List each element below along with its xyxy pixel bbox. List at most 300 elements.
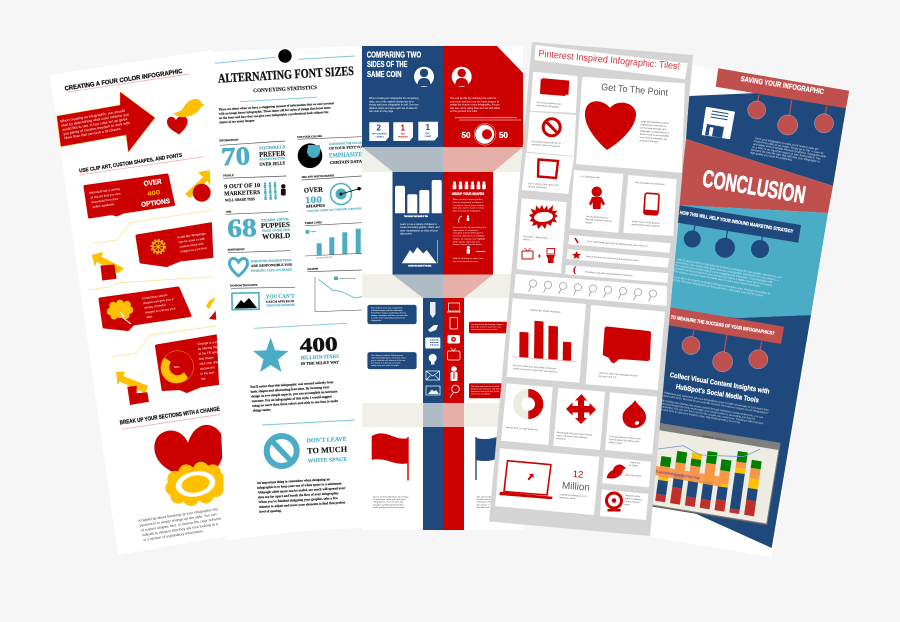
text: notice: design on two simple aspects, you can accomplish an intricate	[251, 389, 338, 398]
tile: water drop	[605, 392, 657, 454]
panel: red group shapes: choose 'Group' from the menu.	[453, 243, 482, 246]
callouts: blue: easily move and resize the object.	[371, 364, 400, 367]
icon: no sign	[267, 436, 297, 466]
stat: one 68 years: PUPPIES	[261, 221, 290, 230]
chart: stacked bar dashboard: Statistics - Analytics	[702, 434, 727, 442]
tile: no sign	[527, 112, 576, 156]
stat: mix and match shapes: SHAPES	[306, 203, 326, 209]
tile: get to the point: doesn't have to use incredible	[640, 133, 670, 138]
stat: one 68 years: 68	[227, 213, 257, 243]
heading: collect insights: Collect Visual Content Insights with	[669, 372, 770, 396]
callouts: red: You should start by choosing a logical	[471, 323, 503, 326]
icon: picture	[426, 386, 440, 395]
text: right intro: You can do this by choosing one color for	[450, 96, 497, 100]
chart: time lines bars: Legend	[310, 231, 316, 233]
title: COMPARING TWO	[367, 50, 421, 60]
text: break up: A helpful tip about breaking up your infographic into	[138, 507, 218, 523]
chart: time lines bars: 2011 2012 2013 2014	[316, 257, 332, 259]
stat: 400 billion stars: IN THE MILKY WAY	[301, 360, 339, 366]
tile: stacked pages: information and graphic	[536, 104, 560, 109]
stat: information 70: OVER JELLY	[259, 162, 286, 168]
stat: mix and match shapes	[302, 174, 362, 213]
icon: target	[330, 184, 362, 204]
callouts: red: experiment and you'll soon create	[471, 390, 499, 393]
stat: random thoughts: RANDOM THOUGHTS	[230, 284, 258, 287]
text: saving: as a PNG is an important aspect of your final product. This	[752, 145, 822, 161]
title: SIDES OF THE	[367, 59, 408, 69]
stat: information 70	[219, 138, 286, 171]
stat: one 68 years: YEARS UNTIL	[261, 217, 291, 222]
panel: red group shapes: them around your infographic.	[453, 210, 482, 213]
callout: fill donut: Change is a snap	[197, 339, 222, 346]
icon: big heart	[154, 425, 224, 482]
stat: random thoughts	[230, 284, 295, 310]
icon: blue flag	[475, 436, 500, 480]
callouts: blue: to create some commonly used icons for	[371, 316, 405, 320]
stat: mix and match shapes: 100	[305, 195, 322, 206]
callout: fill donut: in the tool	[200, 370, 214, 376]
tile: laptop stat: Million	[561, 481, 590, 494]
text: notice: things easier.	[253, 408, 271, 413]
text: intro: clutter of too many images.	[219, 118, 255, 124]
text: white space: An important thing to remember when designing an	[257, 477, 330, 485]
chart: time lines bars: TIMES LINES	[305, 221, 322, 225]
stat: sentiments heart: INBOUND MARKETERS	[251, 258, 292, 263]
stat: sentiments heart: ARE RESPONSIBLE FOR	[251, 263, 293, 268]
text: saving: format is the best file type that will keep your infographic in	[751, 148, 821, 164]
icon: arrow and circle	[185, 170, 211, 202]
tile: cell phones: A lot of people use cell phones	[635, 181, 666, 186]
stat: information 70: PEANUT BUTTER	[259, 156, 286, 161]
text: break up: sections is to simply change up the style. You can	[139, 512, 217, 528]
stat: sentiments heart: SENTIMENTS	[228, 248, 245, 252]
heading: break up	[119, 406, 223, 429]
tile: cell phones	[623, 175, 677, 236]
page: comparing two sides of the same coin	[362, 46, 523, 530]
callouts: red	[469, 322, 514, 398]
stat cards: CHART	[424, 135, 432, 138]
tile: water drop: miles of water	[609, 441, 623, 445]
callout: custom shapes: shapes can give you a	[143, 297, 174, 305]
callout: wingdings fonts: custom icons and	[179, 242, 204, 249]
callouts: blue: PowerPoint. Using a combination of basic	[371, 312, 406, 314]
tile: title: Pinterest Inspired Infographic: Tiles!	[538, 49, 680, 72]
text: left intro: data, one of the easiest design tips is to	[369, 99, 414, 103]
tile: four arrows: tapers will travel in four different	[556, 434, 588, 439]
chart: graphs line: GRAPHS	[307, 268, 319, 271]
icon: red person	[452, 67, 472, 87]
heading: four color: CREATING A FOUR COLOR INFOGRAPHIC	[64, 68, 183, 92]
text: flag left: to two major colors you give your	[373, 498, 406, 501]
text: right intro: each side and then use the basic shapes to	[450, 99, 500, 103]
tile: no sign: Don't forget to pay attention to	[531, 140, 562, 145]
text: insights: get great insight into how much traffic your visual content is generating and how it's	[661, 401, 756, 421]
tile: square outline: Use a variety of the ideas to fill	[528, 182, 559, 187]
icon: laptop	[499, 461, 553, 499]
icon: magnifier	[450, 385, 459, 398]
tile: marketers: Use the perfect icon to	[586, 215, 608, 220]
callouts: blue	[367, 305, 417, 369]
callouts: red: most in the area below	[471, 392, 491, 396]
tile: burst	[517, 198, 567, 273]
heading: white space: WHITE SPACE	[308, 457, 348, 464]
tile: title	[534, 45, 688, 79]
stat cards: HEADERS	[398, 136, 408, 138]
heading banner: saving: SAVING YOUR INFOGRAPHIC	[740, 74, 825, 96]
panel: red group shapes: You can do this by right clicking the	[453, 226, 487, 229]
stat: 400 billion stars: BILLION STARS	[301, 354, 339, 361]
tile: donut	[501, 383, 553, 445]
text: saving: high quality you need for publishing.	[750, 150, 793, 162]
text: inbound: fine way to have content that is more engaging and shareable. This infographic will	[675, 263, 773, 284]
stat cards: 1	[400, 124, 406, 132]
tile: marketers	[570, 170, 623, 233]
tile: webcam	[600, 489, 648, 520]
text: break up: of custom shapes, text, or inverse the color scheme	[140, 517, 221, 533]
heading banner: inbound: HOW THIS WILL HELP YOUR INBOUND MARKETING STRATEGY	[679, 210, 794, 235]
chart: stacked bar dashboard	[652, 423, 780, 526]
stat: information 70: 70	[220, 141, 251, 171]
chart: graphs line: Information from the web	[339, 277, 356, 280]
callout: fill donut: that shape.	[199, 355, 215, 361]
text: white space: minutes to adjust and move your elements to find that perfect	[259, 500, 346, 509]
icon: arrow and triangle	[206, 297, 218, 320]
icon: arrow and square	[92, 252, 124, 280]
icon: tablet	[450, 318, 458, 329]
callouts: red: particular icon schemes, and with a little	[471, 388, 504, 390]
callout: over 400 options: of clip art that you can	[90, 191, 121, 200]
text: flag left: designs a professional feel that	[373, 503, 404, 506]
pins: saving	[748, 95, 834, 135]
chart: 50/50 donut: 50	[499, 131, 509, 140]
callout: custom shapes: Combining custom	[142, 293, 168, 300]
tile: get to the point: infographic a visual balance. It	[640, 130, 670, 135]
text: insights: those who don't. But how do you actually measure the business impact of your infographics?	[663, 394, 769, 415]
stat: use your colors: CERTAIN DATA	[330, 159, 362, 165]
icon: tv	[448, 348, 460, 360]
stat: use your colors: ALTERNATE THE COLOR	[329, 141, 363, 146]
arrow callout: color scheme	[57, 92, 155, 152]
tile: get to the point: Large tiles should be used to	[641, 120, 670, 125]
heading banner: measure	[667, 307, 784, 344]
callouts: red: that make sense to show how it can	[471, 326, 501, 328]
icon: hand	[428, 325, 438, 332]
text: inbound: interesting. Use visuals with large amounts of actionable information for your viewers, a	[676, 260, 779, 282]
text: break up: or a section of explanatory information.	[143, 529, 204, 542]
page: pinterest tiles	[489, 42, 693, 536]
stat: people 9 out of 10	[223, 174, 287, 202]
stat: 400 billion stars	[299, 333, 339, 366]
tile: four arrows: Most people that move East Flemish	[557, 431, 593, 437]
stat: mix and match shapes: OVER	[304, 186, 324, 195]
callout: over 400 options: OVER	[143, 179, 162, 188]
text: inbound: Use of visual content in the inbound market is a demand for high quality, educational, and	[677, 257, 783, 280]
text: left intro: When creating an infographic for comparing	[369, 96, 419, 100]
stat: one 68 years	[226, 210, 291, 243]
tile: get to the point: central important take your	[640, 126, 666, 131]
text: flag right: make your content	[477, 501, 495, 504]
stat cards: CHARTS	[376, 136, 384, 138]
stat: people 9 out of 10: MARKETERS	[224, 190, 261, 197]
panel: blue bar chart: create interesting graphs, charts, and	[400, 226, 440, 229]
panel: red group shapes	[443, 172, 493, 274]
panel: red group shapes: all the pieces, right click and	[453, 240, 480, 243]
tile: bar graph: Be sure to label your bar graphs so that your	[513, 364, 557, 370]
callout: fill donut	[156, 335, 225, 392]
text: flag left: infographics. You can give and	[373, 501, 404, 504]
panel: blue bar chart	[392, 172, 443, 274]
tile: bar graph: viewers are aware of what they are looking at.	[513, 367, 558, 374]
callout: over 400 options: OPTIONS	[141, 198, 171, 209]
heading: clip art: USE CLIP ART, CUSTOM SHAPES, AND FONTS	[79, 153, 183, 174]
tile: cell phones: representing simple statistics	[631, 223, 661, 228]
callout: wingdings fonts	[137, 223, 216, 266]
arrow callout: color scheme: would like to use. A four color set up gives	[62, 117, 128, 132]
tile: burst: Infinite!	[522, 238, 530, 242]
stat: random thoughts: THROUGH ORANGES	[266, 303, 295, 307]
text: flag left: looks polished and easy to read.	[373, 506, 405, 509]
tile: webcam: Webcams were	[625, 494, 641, 498]
heading: conclusion: CONCLUSION	[701, 165, 808, 209]
page: four color infographic	[50, 50, 262, 555]
stat: mix and match shapes: CAN BE USED TO CREATE GRAPHS	[307, 207, 362, 213]
text: white space: infographic is to keep your use of white space to a minimum.	[257, 481, 342, 490]
text: white space: level of spacing.	[259, 509, 282, 514]
icon: red flag	[372, 433, 409, 480]
tile: get to the point: connect to the topic.	[639, 139, 659, 144]
callout: wingdings fonts: Fonts like Wingdings	[177, 231, 206, 239]
callouts: red: come from here to use on other	[471, 328, 498, 331]
text: notice: outcome. For an infographic of this style, I would suggest	[252, 394, 333, 403]
callout: over 400 options: 400	[147, 189, 161, 198]
icon: blue person	[414, 67, 434, 87]
chart: white mountain: SHAPES THAT MAKE UP THE AREA	[408, 264, 432, 268]
text: inbound: have fun with your infographics as they take time, and make sure that it's yours!	[670, 277, 764, 298]
icon: arrow and L shape	[116, 372, 149, 405]
stat: people 9 out of 10: PEOPLE	[223, 174, 234, 177]
icon: people grid	[264, 182, 286, 200]
callouts: blue: individual shapes and then offered by	[371, 309, 402, 312]
stat: mix and match shapes: MIX AND MATCH SHAPES	[302, 174, 335, 179]
stat cards: TWO	[400, 134, 406, 136]
stat: sentiments heart: FINDING LIFE ON MARS	[251, 268, 292, 273]
tile: water drop: Earth is about 326 million cubic	[609, 438, 640, 443]
callout: custom shapes: data.	[146, 314, 153, 319]
strips: facts: Most of the stars you view from Earth are Binary Stars	[586, 255, 639, 262]
tile: water drop: The total amount of water on the	[609, 435, 642, 441]
icon: yellow cloud	[162, 458, 229, 510]
icon: person and line	[467, 246, 485, 254]
chart: 50/50 donut: 50	[462, 131, 471, 140]
heading: white space: TO MUCH	[307, 445, 348, 455]
text: saving: PowerPoint slide as an image. Simply go to File -> Save As	[754, 139, 825, 155]
icon strip: blue	[423, 298, 443, 530]
panel: red group shapes: from an assortment of shapes, it	[453, 201, 484, 204]
tile: marketers: people	[585, 222, 593, 224]
text: notice: basic shapes and alternating font sizes. By focusing your	[250, 385, 330, 394]
icon: camera	[448, 335, 460, 344]
chart: 50/50 donut	[462, 124, 509, 145]
text: insights: converting. You can use this to inform the visuals you create next. Tracking it with HubSpot	[661, 404, 764, 425]
text: saving: Once your infographic is ready, you'll need to save the	[755, 136, 819, 151]
strip: magnifiers	[514, 274, 667, 306]
text: inbound: The viewers, and fans have an easier way to share your content and links.	[673, 269, 761, 288]
tile: text messages: About 6.1 billion text messages are sent	[599, 372, 638, 378]
panel: red group shapes: 'Grouping' and Ctrl ('Grouped' to	[453, 232, 484, 235]
icon strip: red	[443, 298, 464, 530]
tile: four arrows	[553, 388, 605, 450]
arrow callout: color scheme: start by determining what color scheme you	[61, 112, 129, 128]
tile: get to the point	[576, 77, 685, 173]
title: SAME COIN	[367, 69, 402, 79]
heading banner: measure: TO MEASURE THE SUCCESS OF YOUR INFOGRAPHICS?	[670, 315, 775, 337]
stat: use your colors: OF YOUR TEXT TO	[329, 145, 362, 150]
text: intro: There are times when we have a staggering amount of information that we can't present	[218, 101, 335, 111]
stat: people 9 out of 10: 9 OUT OF 10	[224, 183, 260, 190]
callouts: blue: just 'Group' it so that you can move	[370, 362, 400, 364]
stat cards: 2	[376, 124, 382, 132]
callouts: blue: selecting multiple pieces of an icon. Once	[371, 356, 406, 360]
tile: bar graph	[507, 298, 586, 383]
tile: square outline: up your infographic.	[528, 185, 548, 189]
tile: twitter bird: @scarlettandhue	[625, 474, 642, 478]
text: right intro: create the charts in your infographic. As you	[450, 102, 500, 106]
text: white space: data too far apart and break the flow of your infographic.	[258, 491, 339, 499]
callout: custom shapes	[100, 288, 190, 330]
text: inbound: You can get a lot of great templates and great examples, your viewing! Remember to	[671, 274, 771, 296]
pins: inbound	[684, 225, 769, 258]
callout: wingdings fonts: can be used to add	[178, 237, 205, 244]
panel: blue bar chart: other visualizations to show off your	[400, 229, 438, 232]
stat: information 70: INFORMATION	[219, 138, 239, 142]
icon: tv plus person	[522, 248, 555, 263]
chart: white bars	[395, 180, 442, 213]
icon: curved arrow and person	[459, 215, 469, 222]
icon: laptop	[447, 303, 461, 312]
callout: fill donut: by altering the	[198, 345, 218, 351]
icon: pencil	[430, 302, 436, 318]
text: flag right: the viewer, in	[477, 503, 490, 506]
chart: donut 50%: 50%	[174, 365, 180, 369]
page: conclusion infographic	[650, 65, 850, 557]
chart: graphs line	[307, 268, 362, 312]
tile: twitter bird: Follow me	[630, 462, 641, 465]
tile: get to the point: emphasize a main point or	[640, 123, 666, 128]
funnel to icon strip	[392, 274, 493, 298]
stat: sentiments heart	[228, 248, 293, 276]
text: inbound: provides the best content to your viewers and offers a highly visual piece of content.	[674, 266, 773, 287]
pins: measure	[682, 330, 768, 372]
strips: facts: Over 1,000 people get struck by lightning each year in the U.S.	[587, 240, 648, 248]
text: intro: with an image heavy infographic. These times call for styles of design that focus more	[219, 106, 331, 116]
tile: square outline	[522, 153, 574, 194]
arrow callout: color scheme: you plenty of creative freedom to work with.	[63, 121, 131, 136]
stat: one 68 years: TAKE OVER THE	[262, 228, 290, 233]
title: ALTERNATING FONT SIZES	[218, 63, 354, 86]
text: break up: indicate to viewers that they are now looking at a	[142, 522, 218, 537]
icon: cloud with bolt	[107, 300, 133, 324]
callout: over 400 options: online database.	[92, 202, 115, 209]
icon: bulb	[429, 354, 437, 364]
tile: laptop stat: recipts per week!	[559, 496, 576, 500]
text: insights: By hosting and sharing your visual content through HubSpot's social media tools, you can	[662, 398, 764, 419]
callout: wingdings fonts: images to your text.	[180, 246, 208, 254]
icon: keyboard	[425, 338, 440, 348]
stat cards	[369, 122, 438, 141]
arrow callout: color scheme: When creating an infographic, you should	[60, 109, 125, 123]
tile: laptop stat: 12	[572, 469, 584, 481]
callout: fill donut: access the	[200, 365, 215, 371]
icon: person	[589, 186, 605, 209]
strips: facts	[565, 235, 671, 283]
stat cards: ONE	[425, 133, 430, 135]
icon: phone	[644, 193, 659, 215]
text: right intro: can see, we're using blue and red with white	[450, 106, 500, 110]
text: left intro: simply split your infographic in half. Use two	[369, 102, 419, 106]
callouts: blue: Each of these icons was created from	[371, 306, 403, 310]
tile: webcam: listed in existence	[625, 497, 643, 501]
callout: fill donut: of the Fill option	[198, 350, 221, 356]
decorative pin	[215, 49, 355, 63]
tile: marketers: illustrate statistics involving	[585, 218, 613, 223]
chart: stacked bar dashboard: #LaunchInfographicFreeTrial	[655, 469, 700, 481]
panel: red group shapes: object (once it's selected or	[453, 229, 479, 232]
heading: break up: BREAK UP YOUR SECTIONS WITH A CHANGE	[119, 406, 220, 426]
tile: marketers: 1 in 3 Marketers will...	[580, 175, 602, 180]
heading banner: saving	[716, 68, 849, 108]
panel: blue bar chart: Learn to use a variety of shapes to	[400, 223, 437, 226]
text: right intro: as the general font color.	[450, 109, 478, 113]
callouts: blue: shapes, rectangles, and lines, we were able	[371, 314, 408, 317]
panel: red group shapes: GROUP YOUR SHAPES	[452, 192, 485, 196]
tile: twitter bird	[602, 457, 651, 487]
tile: four arrows: directions	[556, 437, 567, 441]
callout: fill donut: click your shape	[199, 360, 222, 366]
heading: white space: DON'T LEAVE	[307, 437, 347, 444]
stat: random thoughts: YOU CAN'T	[266, 294, 295, 300]
stat: random thoughts: CATCH APPLES IN	[266, 299, 295, 304]
stat cards: 1	[426, 123, 430, 132]
tile: bar graph: Random Bar Graph Information	[530, 309, 561, 314]
tile: get to the point: icons, their and graphics can	[640, 136, 668, 141]
heading: collect insights: HubSpot's Social Media Tools	[675, 384, 759, 405]
callout: over 400 options: Microsoft has a variety	[89, 187, 121, 195]
heading: white space	[307, 437, 348, 464]
strips: facts: The Moon is the only natural satellite of the Earth	[585, 271, 633, 277]
stat: one 68 years: ONE	[226, 210, 232, 214]
text: notice: You'll notice that this infographic was created entirely from	[250, 380, 334, 389]
icon: person row	[453, 181, 486, 189]
text: white space: Although white space can be useful, too much will spread your	[257, 486, 346, 495]
stat: people 9 out of 10: WILL SHARE THIS	[225, 197, 255, 202]
tile: cell phones: Simple icons can be great for	[632, 220, 660, 225]
arrow callout: color scheme: More than that can look a bit chaotic.	[64, 127, 122, 140]
stat: use your colors	[297, 135, 363, 168]
text: insights: or click here to start your insights today. http://hubs.ly/mi5LS Free Trial	[660, 407, 741, 424]
stat: one 68 years: WORLD	[262, 231, 291, 241]
stat: information 70: PREFER	[259, 149, 286, 159]
panel: blue bar chart: data points.	[400, 233, 413, 236]
panel: blue bar chart: THE SHAPES THAT MAKE UP THIS	[404, 215, 429, 218]
text: flag right: the video will	[477, 506, 490, 509]
icon: person with tie	[450, 366, 458, 381]
tile: burst: Characters + Memes they	[523, 235, 549, 240]
callout: custom shapes: variety of useful	[144, 303, 166, 310]
icon: envelope	[426, 371, 440, 380]
callout: over 400 options: download from their	[91, 197, 119, 204]
icon: star	[253, 338, 288, 372]
stat: use your colors: USE YOUR COLORS	[297, 135, 323, 139]
